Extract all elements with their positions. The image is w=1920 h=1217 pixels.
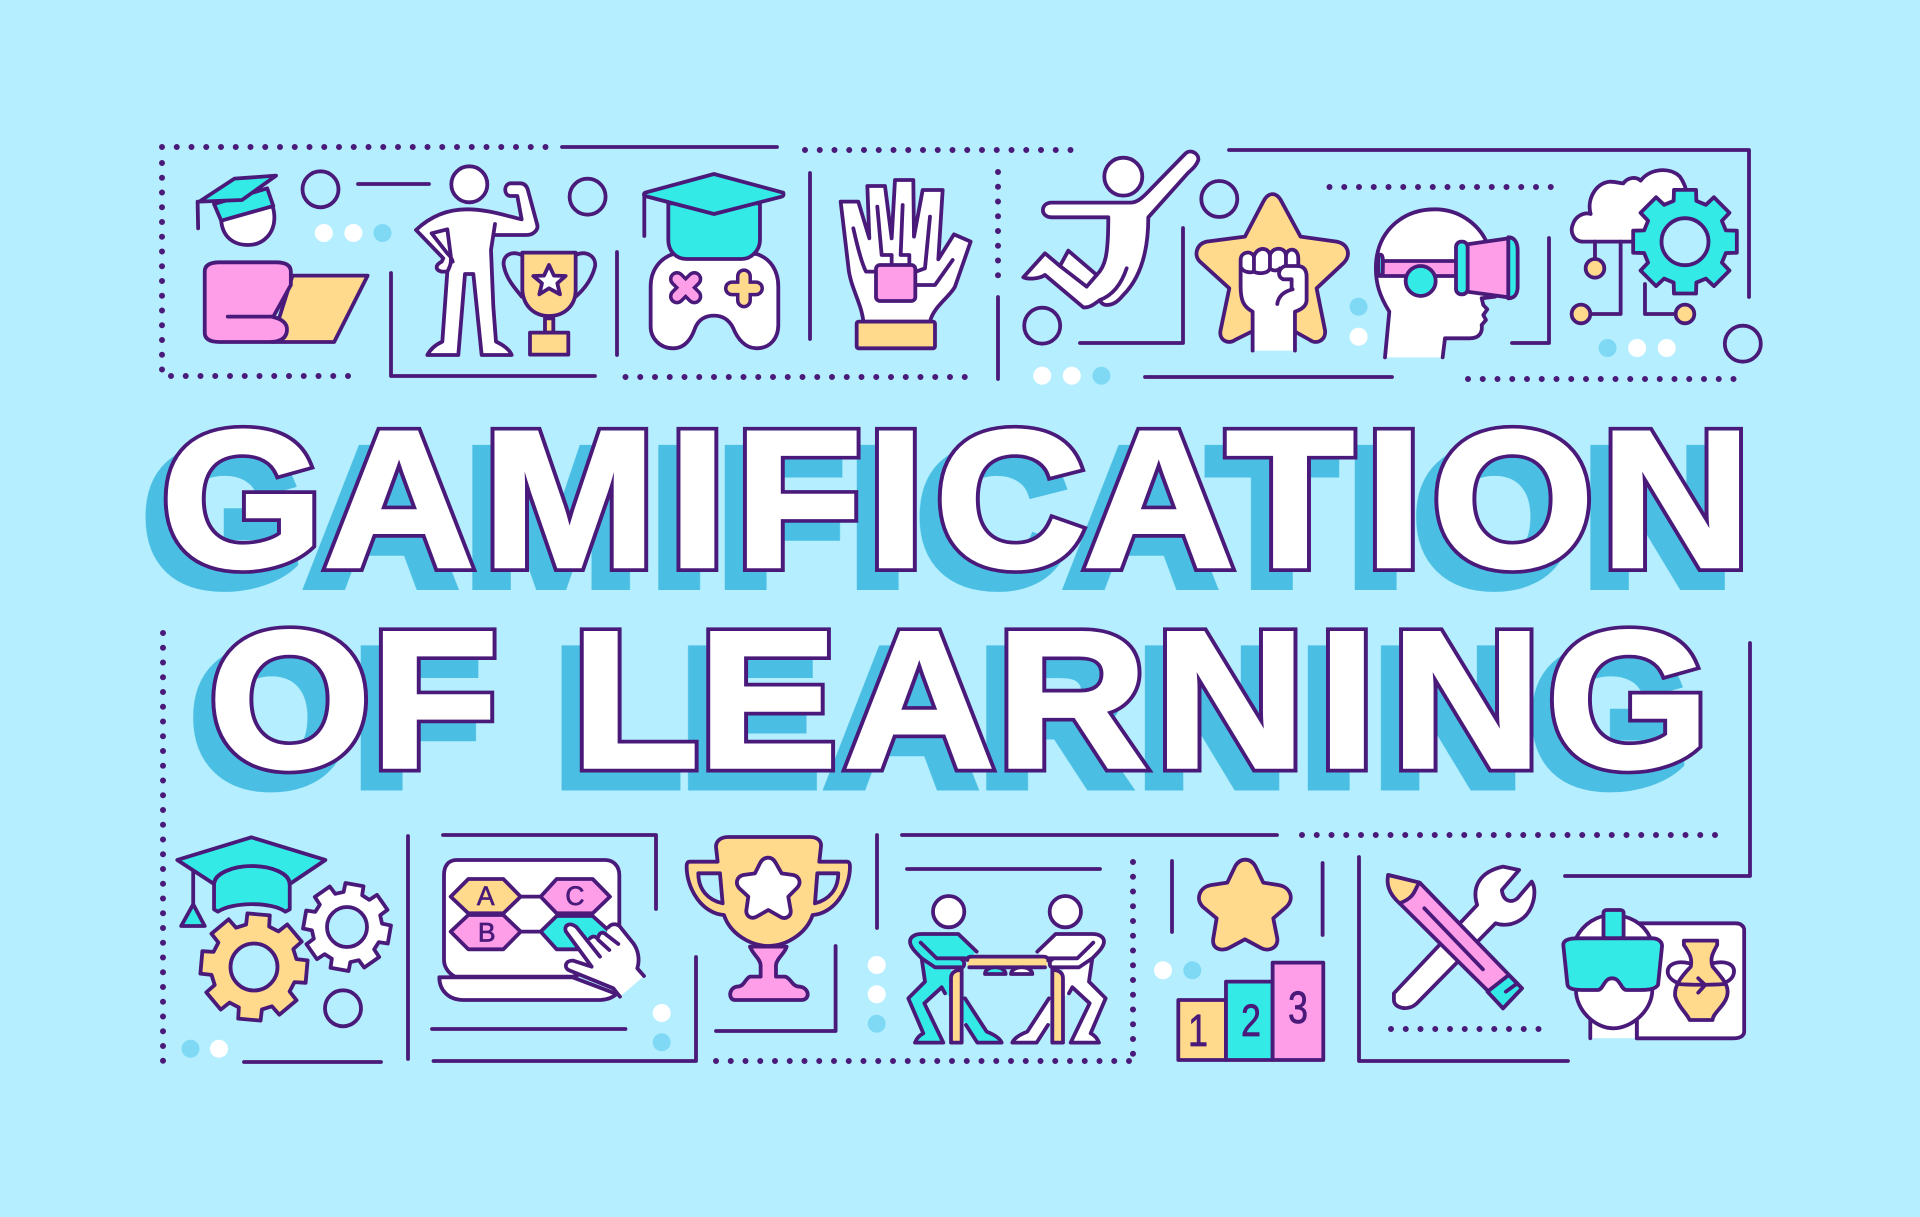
heading line 2: OF LEARNING: [209, 590, 1710, 809]
decorative open circles: [302, 171, 1761, 1026]
icon: two people at a table: [908, 896, 1106, 1043]
answer letters: C: [565, 881, 585, 911]
icon: podium with places 1 2 3: [1178, 963, 1323, 1060]
icon: head with VR headset: [1376, 209, 1518, 357]
decorative filled dots: [182, 224, 1676, 1058]
heading line 2: OF LEARNING: [209, 590, 1710, 809]
icon: cloud with gear and circuit: [1572, 170, 1737, 323]
icon: star: [1199, 860, 1291, 950]
icon: graduation cap on game controller: [644, 174, 784, 348]
icon: person in VR headset viewing vase: [1563, 910, 1744, 1038]
podium numbers: 3: [1288, 982, 1308, 1033]
icon: trophy cup with star: [687, 837, 850, 1000]
answer letters: A: [477, 881, 495, 911]
answer letters: [477, 881, 585, 948]
icon: graduation cap with gears: [177, 837, 397, 1024]
icon: crossed pencil and wrench: [1388, 867, 1534, 1008]
podium numbers: 1: [1188, 1005, 1208, 1056]
icon: strong man with trophy: [416, 166, 595, 355]
heading line 1: GAMIFICATION: [161, 390, 1751, 608]
icon: star with raised fist: [1196, 194, 1348, 351]
answer letters: B: [478, 918, 496, 948]
heading line 1: GAMIFICATION: [161, 390, 1751, 608]
icon: tablet quiz with hexagon answers and pointing hand: [439, 860, 644, 1000]
icon: smart glove: [841, 180, 971, 348]
icon: jumping person: [1023, 152, 1198, 307]
podium numbers: [1188, 982, 1308, 1056]
icon: graduate with laptop: [198, 176, 368, 342]
frame: dotted and solid rules: [162, 147, 1750, 1064]
podium numbers: 2: [1241, 995, 1261, 1046]
